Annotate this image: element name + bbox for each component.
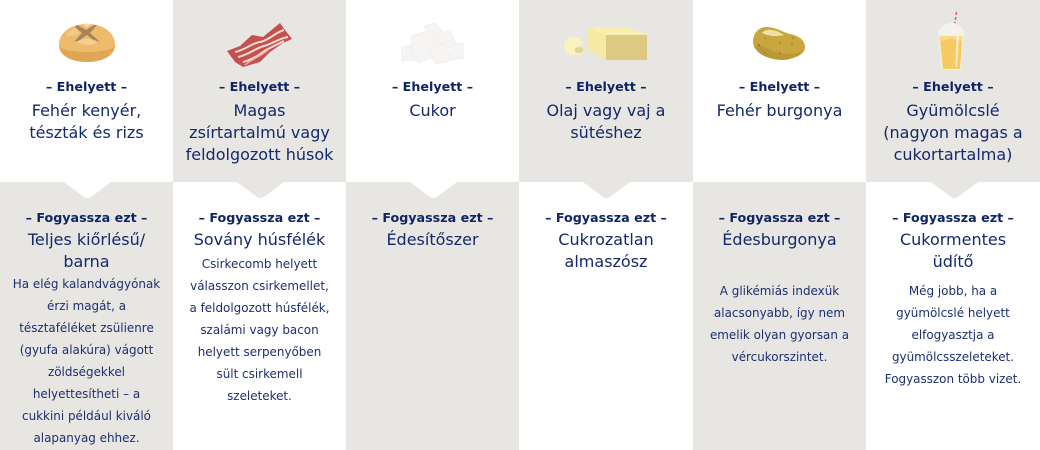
label: consume this: – Fogyassza ezt – [892,210,1014,225]
body text: alapanyag ehhez. [33,431,140,445]
icon: butter [564,27,647,60]
body text [189,257,330,403]
icon: sugar cubes [402,22,464,64]
column 5: potato [710,79,849,364]
body text: Fogyasszon több vizet. [885,372,1021,386]
column 2: meat [186,79,334,403]
heading: fatty meats: zsírtartalmú vagy [189,123,330,142]
heading: white potato: Fehér burgonya [717,101,842,120]
heading: oil or butter [547,101,665,142]
body text: helyettesítheti – a [33,387,140,401]
heading: wholegrain: Teljes kiőrlésű/ [28,230,145,249]
label: instead of: – Ehelyett – [46,79,127,94]
heading: fruit juice: (nagyon magas a [883,123,1023,142]
heading: sweet potato: Édesburgonya [722,230,837,249]
label: consume this: – Fogyassza ezt – [545,210,667,225]
heading: fruit juice [883,101,1023,164]
heading: applesauce: almaszósz [565,252,647,271]
body text: tésztaféléket zsülienre [19,321,154,335]
icon: juice cup [938,12,964,70]
heading: fatty meats: feldolgozott húsok [186,145,333,164]
body text: helyett serpenyőben [198,345,321,359]
body text: vércukorszintet. [732,350,827,364]
icon: bacon [227,23,292,67]
heading: oil or butter: Olaj vagy vaj a [547,101,665,120]
body text: emelik olyan gyorsan a [710,328,849,342]
body text: sült csirkemell [216,367,303,381]
column 6: juice [883,79,1023,386]
heading: fruit juice: Gyümölcslé [906,101,1000,120]
heading: fatty meats: Magas [234,101,285,120]
body text [13,277,160,445]
heading: fatty meats [186,101,334,164]
body text: Még jobb, ha a [909,284,997,298]
heading: sugar-free soda: üdítő [933,252,973,271]
body text: szalámi vagy bacon [200,323,319,337]
heading: sweetener: Édesítőszer [386,230,479,249]
heading: white bread [29,101,144,142]
heading: applesauce [558,230,654,271]
label: consume this: – Fogyassza ezt – [26,210,147,225]
heading: applesauce: Cukrozatlan [558,230,654,249]
label: consume this: – Fogyassza ezt – [372,210,493,225]
label: instead of: – Ehelyett – [739,79,820,94]
label: instead of: – Ehelyett – [219,79,300,94]
heading: sugar-free soda: Cukormentes [900,230,1006,249]
body text [885,284,1021,386]
heading: lean meats: Sovány húsfélék [194,230,325,249]
heading: wholegrain [28,230,146,271]
body text: gyümölcslé helyett [896,306,1010,320]
heading: white bread: tészták és rizs [29,123,144,142]
body text: alacsonyabb, így nem [714,306,845,320]
column 1: bread [13,79,160,445]
body text: cukkini például kiváló [22,409,151,423]
column 3: sugar [372,79,493,249]
icon: potato [752,27,805,60]
body text: érzi magát, a [47,299,126,313]
body text [710,284,849,364]
body text: Csirkecomb helyett [202,257,317,271]
body text: A glikémiás indexük [720,284,839,298]
heading: white bread: Fehér kenyér, [32,101,141,120]
body text: válasszon csirkemellet, [190,279,329,293]
heading: sugar-free soda [900,230,1006,271]
heading: fruit juice: cukortartalma) [894,145,1012,164]
label: instead of: – Ehelyett – [912,79,994,94]
body text: zöldségekkel [48,365,125,379]
heading: oil or butter: sütéshez [570,123,642,142]
heading: sugar: Cukor [409,101,456,120]
icon: bread roll [59,24,115,62]
label: consume this: – Fogyassza ezt – [199,210,320,225]
body text: szeleteket. [227,389,292,403]
label: consume this: – Fogyassza ezt – [719,210,840,225]
body text: (gyufa alakúra) vágott [20,343,153,357]
body text: elfogyasztja a [911,328,995,342]
heading: wholegrain: barna [63,252,110,271]
body text: gyümölcsszeleteket. [892,350,1014,364]
column 4: butter [545,79,667,271]
body text: a feldolgozott húsfélék, [189,301,330,315]
body text: Ha elég kalandvágyónak [13,277,160,291]
label: instead of: – Ehelyett – [392,79,473,94]
label: instead of: – Ehelyett – [565,79,647,94]
